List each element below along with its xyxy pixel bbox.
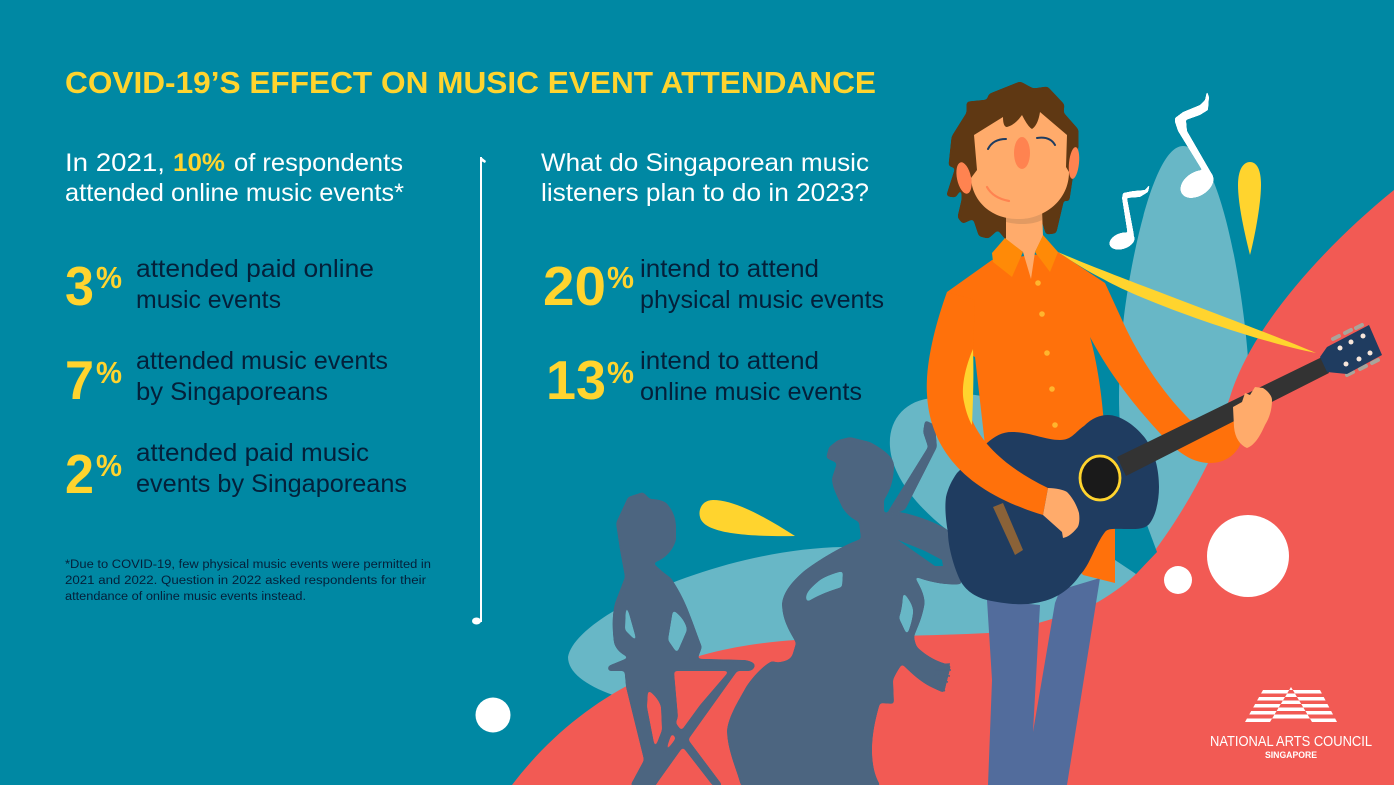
footnote: attendance of online music events instead. xyxy=(65,591,306,603)
guitar head xyxy=(1320,325,1382,374)
stat: 13% xyxy=(546,347,862,411)
smile xyxy=(987,187,1009,201)
yellow drop xyxy=(1238,162,1261,255)
guitar sound hole xyxy=(1080,456,1120,500)
stat: 2%: 2 xyxy=(65,443,94,505)
right heading xyxy=(541,149,869,207)
stat: 3% xyxy=(65,255,374,317)
ear left xyxy=(954,161,974,195)
guitar tuning pegs xyxy=(1333,325,1378,375)
left heading: In 2021, xyxy=(65,149,165,177)
stat: 7%: attended music events xyxy=(136,347,388,375)
guitar bridge xyxy=(993,503,1023,555)
light blue lower blob xyxy=(568,547,1136,695)
stat: 20%: 20 xyxy=(543,255,606,317)
face xyxy=(971,112,1069,219)
stat: 7%: by Singaporeans xyxy=(136,378,328,406)
yellow streak xyxy=(1058,252,1316,353)
stat: 2%: attended paid music xyxy=(136,439,369,467)
stat: 7%: % xyxy=(96,355,122,390)
guitarist xyxy=(927,83,1382,785)
left hand xyxy=(1043,488,1079,538)
stat: 3%: attended paid online xyxy=(136,255,374,283)
guitar neck xyxy=(1117,357,1329,476)
left heading: attended online music events* xyxy=(65,179,404,207)
stat: 13%: 13 xyxy=(546,349,606,411)
logo: National Arts Council xyxy=(1210,686,1372,761)
neck xyxy=(1006,210,1043,279)
light blue upper blob xyxy=(890,394,1000,560)
stat: 3%: music events xyxy=(136,286,281,314)
yellow leaf xyxy=(700,500,795,536)
title: COVID-19’S EFFECT ON MUSIC EVENT ATTENDANCE xyxy=(65,65,876,100)
hair xyxy=(948,83,1077,238)
shirt torso and right arm xyxy=(940,252,1240,583)
silhouette: keyboard player xyxy=(608,492,755,785)
left shirt arm xyxy=(927,292,1048,515)
icon: large music note xyxy=(1175,91,1219,204)
fretting hand xyxy=(1233,387,1272,448)
stat: 2%: events by Singaporeans xyxy=(136,470,407,498)
icon: small music note xyxy=(1107,184,1150,253)
eyes xyxy=(988,138,1055,149)
stat: 13%: online music events xyxy=(640,378,862,406)
silhouette: cellist xyxy=(727,420,962,785)
left heading: 10% xyxy=(173,149,225,177)
guitar head dots xyxy=(1338,334,1372,366)
footnote: 2021 and 2022. Question in 2022 asked respondents for their xyxy=(65,575,426,587)
guitar body xyxy=(945,415,1159,604)
stat: 3%: 3 xyxy=(65,255,94,317)
left heading xyxy=(65,149,404,207)
stat: 20%: physical music events xyxy=(640,286,884,314)
stat: 2%: % xyxy=(96,448,122,483)
shirt buttons xyxy=(1035,280,1058,428)
teal sliver in cellist arm xyxy=(898,540,943,566)
stat: 13%: % xyxy=(607,355,634,390)
stat: 2% xyxy=(65,439,407,505)
yellow sliver at arm xyxy=(963,349,973,425)
stat: 20% xyxy=(543,255,884,317)
collar xyxy=(992,235,1058,277)
left heading: of respondents xyxy=(234,149,403,177)
stat: 7%: 7 xyxy=(65,349,94,411)
footnote xyxy=(65,559,431,603)
light blue tall leaf xyxy=(1119,146,1250,560)
footnote: *Due to COVID-19, few physical music events were permitted in xyxy=(65,559,431,571)
logo: National Arts Council: SINGAPORE xyxy=(1265,750,1317,761)
white circle small xyxy=(1164,566,1192,594)
right heading: What do Singaporean music xyxy=(541,149,869,177)
red hill xyxy=(512,190,1394,785)
stat: 3%: % xyxy=(96,260,122,295)
teal wedge under guitar xyxy=(1113,520,1157,574)
logo: National Arts Council: NATIONAL ARTS COUNCIL xyxy=(1210,733,1372,750)
stat: 7% xyxy=(65,347,388,411)
white circle left xyxy=(476,698,510,732)
stat: 20%: intend to attend xyxy=(640,255,819,283)
white circle large xyxy=(1207,515,1289,597)
jeans xyxy=(987,578,1100,785)
nose xyxy=(1014,137,1030,169)
stat: 20%: % xyxy=(607,260,634,295)
right heading: listeners plan to do in 2023? xyxy=(541,179,869,207)
stat: 13%: intend to attend xyxy=(640,347,819,375)
divider: music note line xyxy=(472,157,486,624)
ear right xyxy=(1067,147,1081,179)
chin shadow xyxy=(1006,213,1042,224)
cellist bow hand xyxy=(935,664,951,691)
